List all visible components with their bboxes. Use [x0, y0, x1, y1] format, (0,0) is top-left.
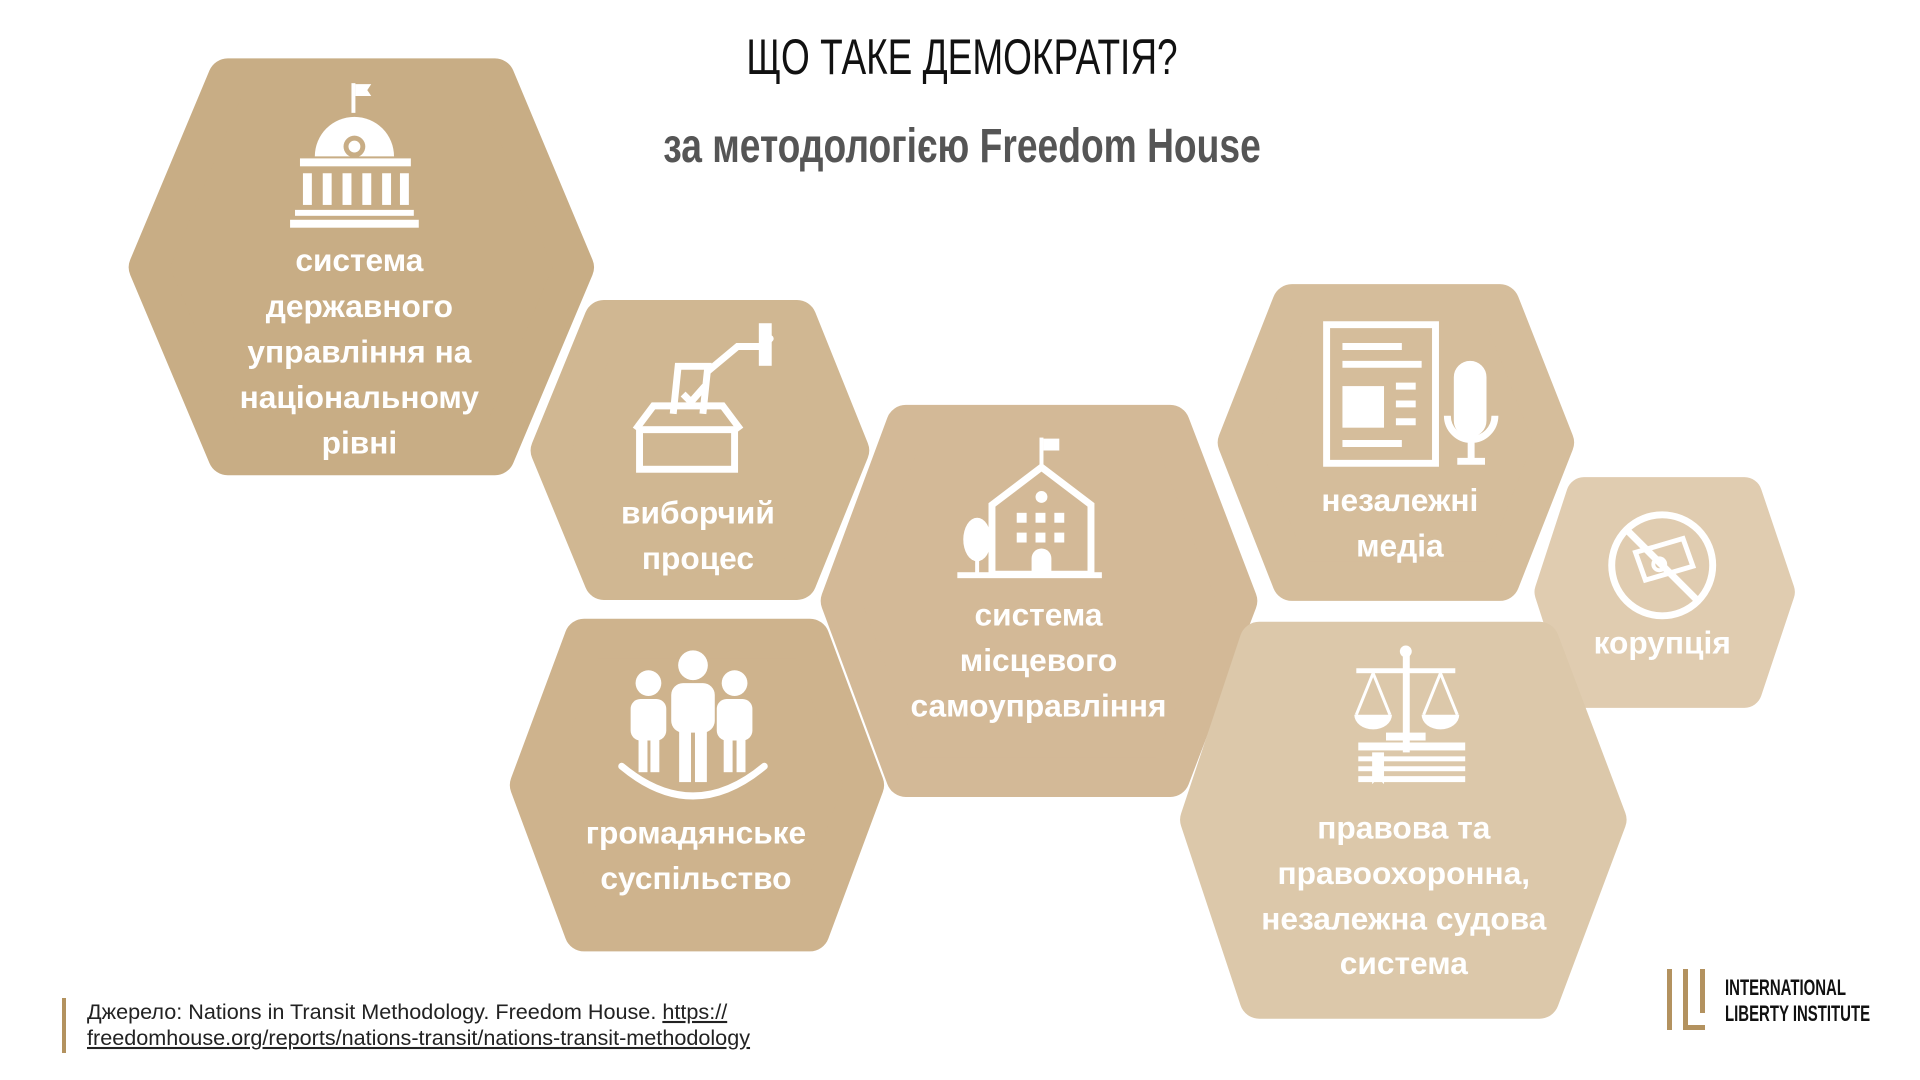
- text: local self-government: система: [974, 597, 1103, 633]
- text: independent media: незалежні: [1321, 482, 1478, 518]
- text: electoral process: виборчий: [621, 495, 775, 531]
- hex: local self-government: [841, 425, 1238, 777]
- icon: newspaper and mic: [1327, 325, 1495, 463]
- hexagon grid: [148, 78, 1777, 999]
- hex: corruption: [1552, 495, 1777, 690]
- source note: Джерело: Nations in Transit Methodology. Freedom House. https://: [87, 1000, 727, 1024]
- subtitle: за методологією Freedom House: [663, 120, 1261, 173]
- text: civil society: громадянське: [586, 814, 806, 850]
- icon: no money: [1612, 515, 1713, 616]
- text: national governance: система: [295, 242, 424, 278]
- text: legal and judicial system: правова та: [1317, 810, 1491, 846]
- text: independent media: медіа: [1356, 527, 1444, 563]
- text: civil society: суспільство: [600, 860, 792, 896]
- text: national governance: рівні: [322, 424, 397, 460]
- text: legal and judicial system: правоохоронна,: [1278, 855, 1530, 891]
- text: electoral process: процес: [642, 540, 754, 576]
- text: local self-government: самоуправління: [911, 688, 1167, 724]
- hex: national governance: [148, 78, 574, 460]
- text: local self-government: місцевого: [960, 642, 1117, 678]
- logo: International Liberty Institute: [1667, 969, 1870, 1030]
- logo: International Liberty Institute: INTERNATIONAL: [1725, 975, 1846, 1000]
- text: national governance: управління на: [247, 333, 472, 369]
- icon: capitol: [290, 83, 419, 228]
- text: corruption: корупція: [1594, 624, 1731, 660]
- icon: people: [631, 650, 752, 782]
- logo: International Liberty Institute: LIBERTY INSTITUTE: [1725, 1001, 1870, 1026]
- text: national governance: державного: [266, 288, 453, 324]
- source note: [62, 998, 750, 1053]
- source note: freedomhouse.org/reports/nations-transit/nations-transit-methodology: [87, 1026, 750, 1050]
- icon: school: [957, 438, 1102, 578]
- icon: ballot box: [636, 327, 770, 469]
- hex: legal and judicial system: [1200, 642, 1607, 999]
- title: ЩО ТАКЕ ДЕМОКРАТІЯ?: [746, 30, 1178, 85]
- text: legal and judicial system: система: [1340, 945, 1468, 981]
- hex: civil society: [530, 639, 864, 932]
- text: legal and judicial system: незалежна судова: [1261, 901, 1547, 937]
- hex: electoral process: [550, 320, 849, 580]
- hex: independent media: [1238, 304, 1554, 581]
- icon: scales and book: [1354, 645, 1465, 784]
- text: national governance: національному: [240, 379, 479, 415]
